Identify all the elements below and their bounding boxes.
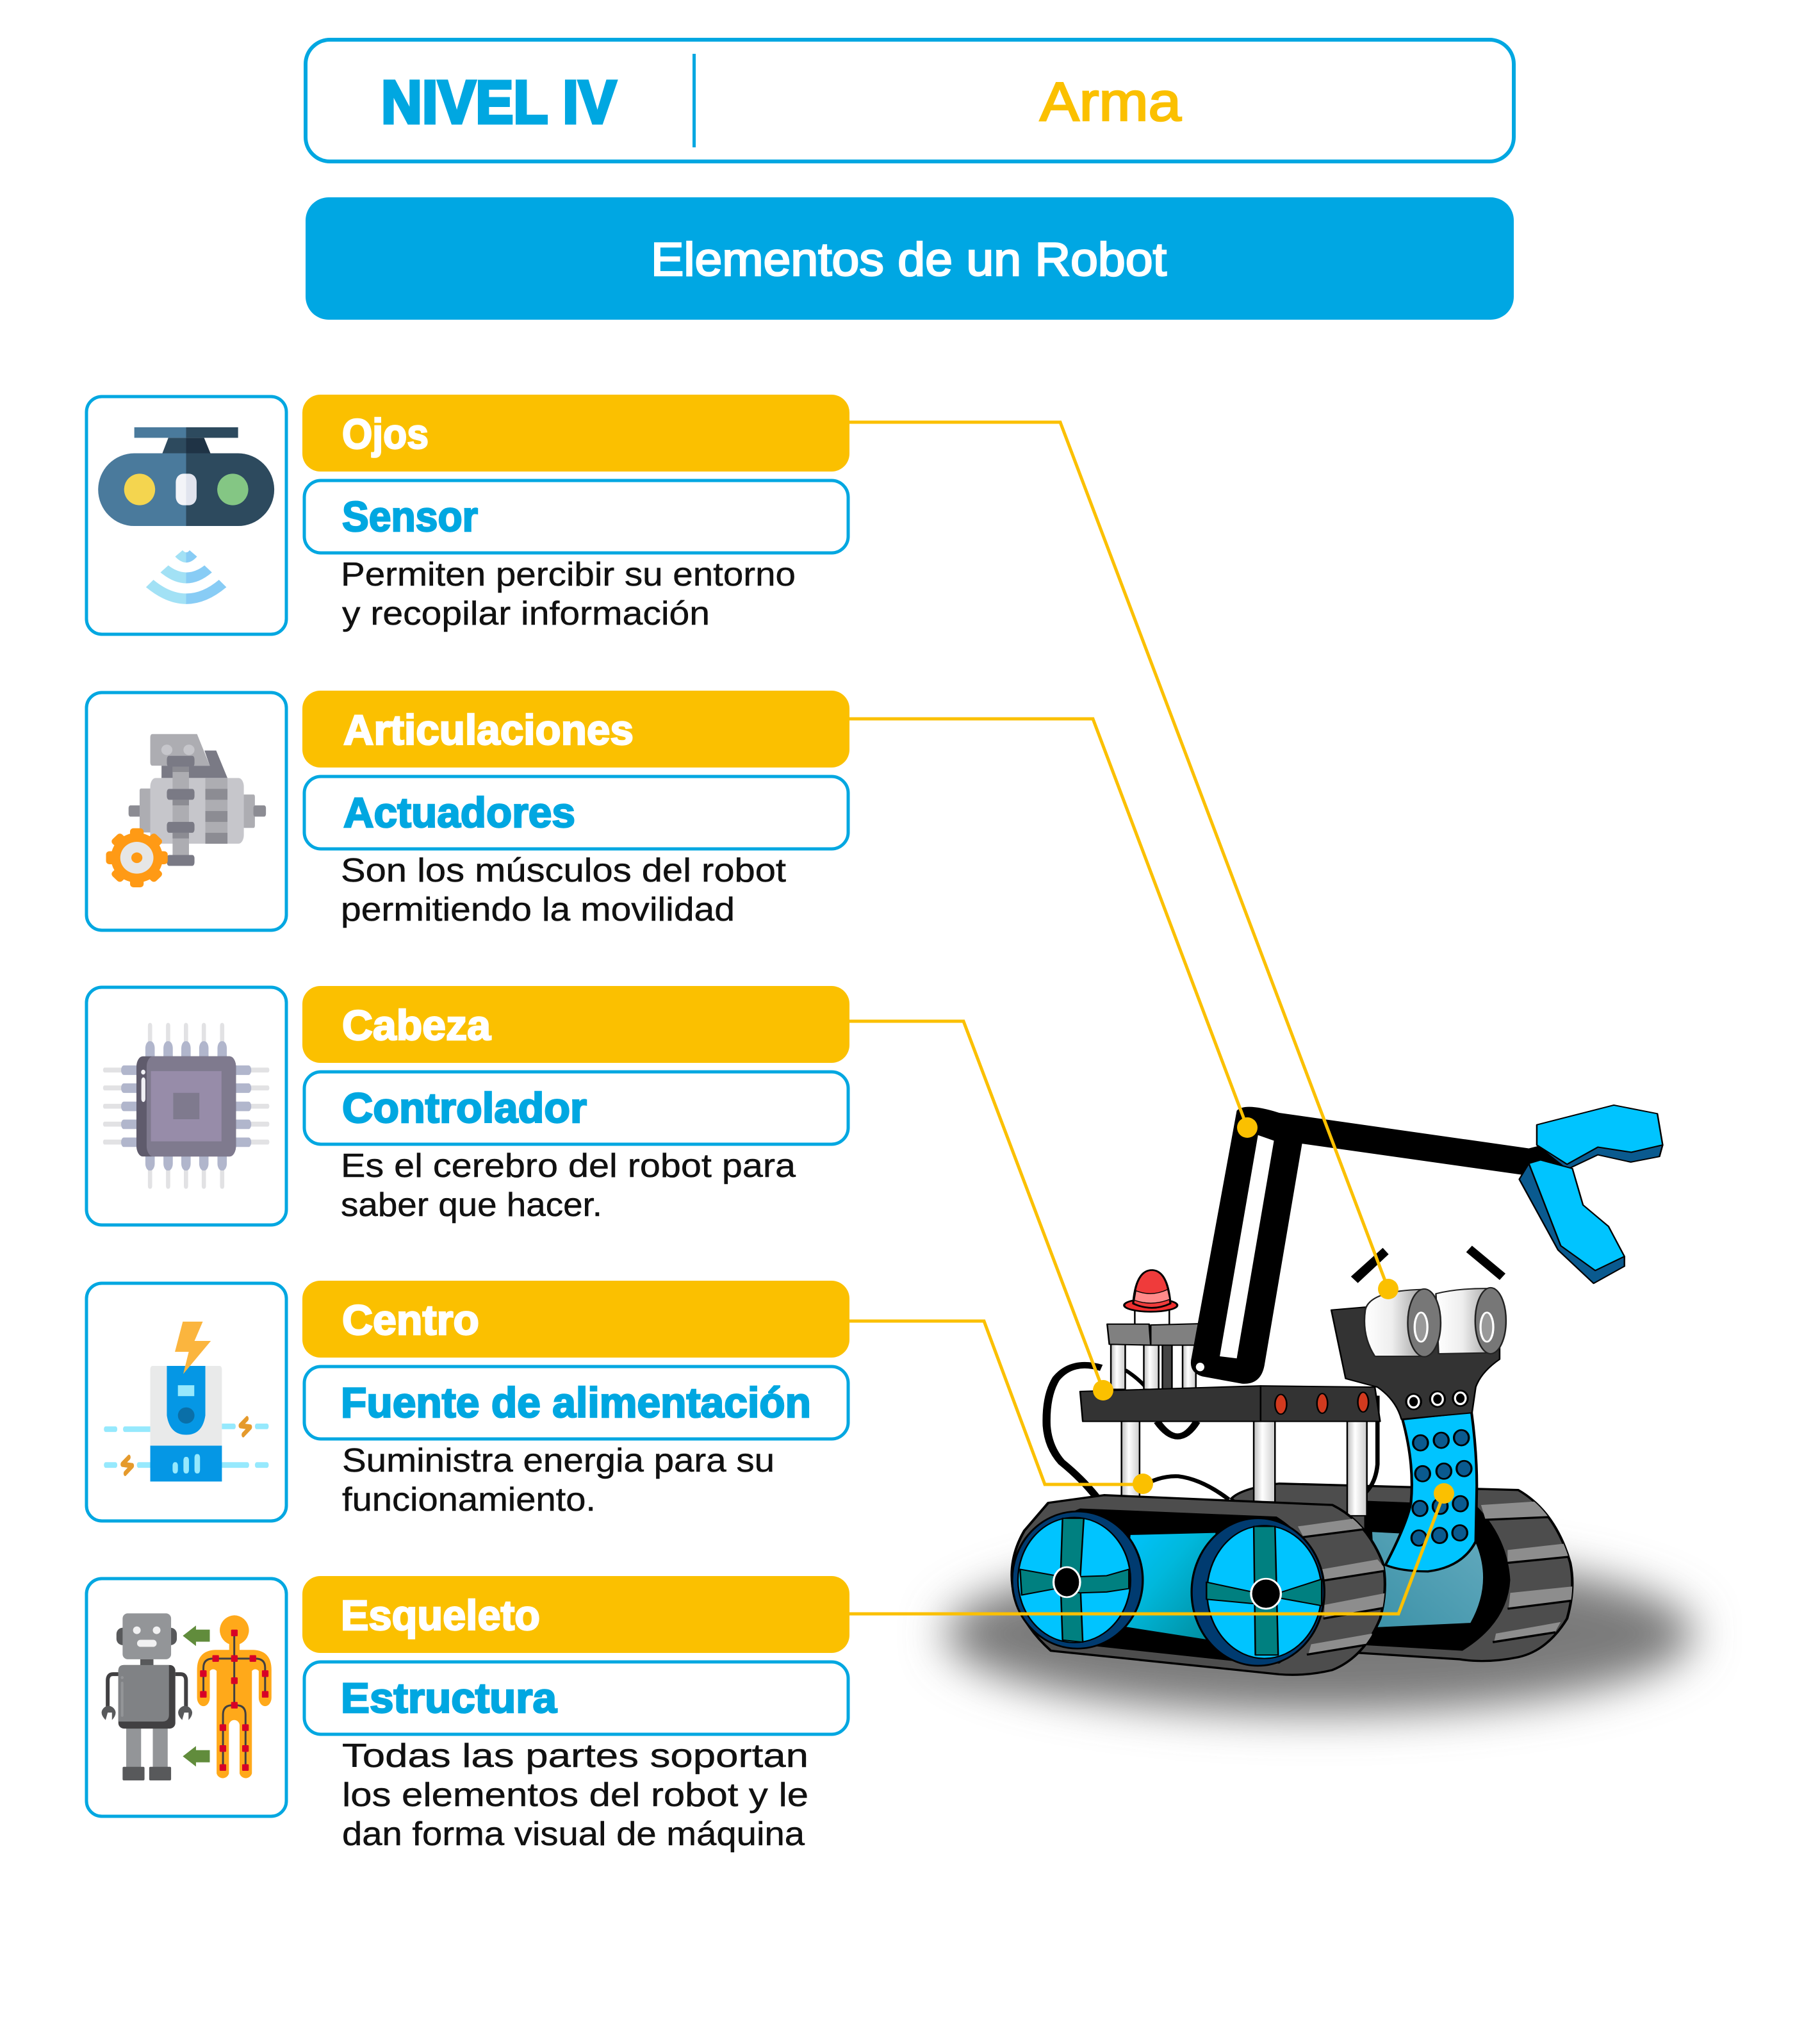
ultrasonic eyes — [1365, 1288, 1506, 1357]
topic label: Arma — [1040, 72, 1182, 133]
connector: Centro to power wire — [849, 1321, 1153, 1494]
ground shadow — [945, 1554, 1694, 1714]
panel: icon sensor — [86, 397, 286, 634]
row: Ojos / Sensor: Ojos — [342, 410, 429, 457]
title bar: Elementos de un Robot — [651, 234, 1167, 286]
wheel left — [1012, 1511, 1143, 1648]
platform — [1080, 1386, 1380, 1422]
row: Centro / Fuente de alimentación: Suministra energia para su — [342, 1442, 775, 1479]
panel: icon controller — [86, 987, 286, 1225]
robot arm — [1191, 1107, 1571, 1384]
row: Articulaciones / Actuadores: Actuadores — [343, 789, 575, 836]
row: Centro / Fuente de alimentación: funcionamiento. — [342, 1481, 596, 1518]
row: Esqueleto / Estructura: los elementos del robot y le — [342, 1777, 808, 1814]
row: Esqueleto / Estructura: Estructura — [341, 1674, 557, 1721]
icon: actuator motor and gear — [106, 734, 266, 887]
icon: robot and skeleton — [102, 1613, 272, 1780]
row: Esqueleto / Estructura: Esqueleto — [341, 1591, 540, 1639]
support columns — [1111, 1344, 1367, 1516]
row: Articulaciones / Actuadores: Articulaciones — [343, 706, 634, 753]
icon: power supply — [104, 1322, 268, 1481]
top plate — [1107, 1324, 1200, 1345]
row: Cabeza / Controlador: Cabeza — [342, 1001, 491, 1049]
row: Centro / Fuente de alimentación — [302, 1281, 849, 1518]
spine — [1386, 1412, 1477, 1572]
title bar — [306, 197, 1514, 320]
row: Cabeza / Controlador: Es el cerebro del robot para — [341, 1147, 796, 1185]
wires — [1047, 1365, 1377, 1503]
row: Ojos / Sensor: y recopilar información — [342, 595, 710, 632]
connector: Articulaciones to arm joint — [849, 719, 1258, 1138]
row: Articulaciones / Actuadores — [302, 691, 849, 928]
level label: NIVEL IV — [381, 69, 616, 136]
row: Articulaciones / Actuadores: permitiendo la movilidad — [341, 891, 735, 928]
front track — [1012, 1495, 1386, 1675]
row: Cabeza / Controlador: saber que hacer. — [341, 1187, 602, 1224]
panel: icon actuator — [86, 693, 286, 930]
illustration: robot — [1012, 1105, 1662, 1675]
row: Ojos / Sensor: Sensor — [342, 493, 478, 540]
icon: microchip — [103, 1023, 269, 1189]
row: Esqueleto / Estructura — [302, 1576, 849, 1853]
connector: Esqueleto to structure — [849, 1483, 1454, 1614]
rear track — [1231, 1484, 1572, 1661]
row: Ojos / Sensor: Permiten percibir su entorno — [341, 556, 796, 593]
panel: icon structure — [86, 1579, 286, 1816]
row: Cabeza / Controlador — [302, 986, 849, 1224]
icon: sensor — [98, 427, 274, 604]
connector: Cabeza to controller — [849, 1021, 1113, 1401]
row: Centro / Fuente de alimentación: Fuente de alimentación — [341, 1379, 811, 1426]
head — [1331, 1307, 1500, 1419]
row: Articulaciones / Actuadores: Son los músculos del robot — [341, 852, 787, 889]
brows — [1351, 1245, 1505, 1283]
gripper — [1520, 1105, 1662, 1283]
header box: level and topic — [306, 40, 1514, 161]
wheel right — [1192, 1518, 1324, 1666]
row: Esqueleto / Estructura: Todas las partes soportan — [342, 1737, 808, 1775]
row: Centro / Fuente de alimentación: Centro — [342, 1296, 479, 1343]
row: Ojos / Sensor — [302, 395, 849, 632]
panel: icon power supply — [86, 1283, 286, 1521]
connector: Ojos to eyes — [849, 422, 1398, 1299]
row: Cabeza / Controlador: Controlador — [342, 1084, 587, 1131]
beacon light — [1124, 1270, 1177, 1324]
row: Esqueleto / Estructura: dan forma visual de máquina — [342, 1816, 805, 1853]
